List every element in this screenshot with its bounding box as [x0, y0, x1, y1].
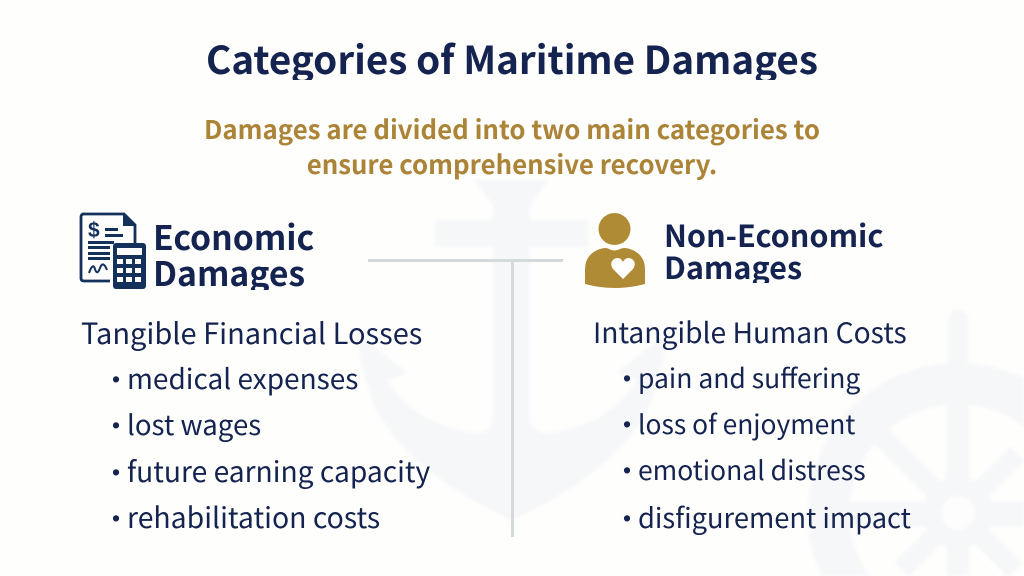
list: non-economic items: disfigurement impact — [638, 496, 911, 536]
list: economic items: • — [112, 412, 120, 438]
list: economic items: • — [112, 459, 120, 485]
icon: financial document and calculator: $ — [88, 219, 100, 242]
subtitle — [204, 110, 820, 182]
icon: person with heart — [585, 213, 645, 288]
heading: economic damages — [153, 218, 314, 290]
subheading: tangible financial losses: Tangible Financial Losses — [81, 311, 422, 353]
list: economic items: medical expenses — [127, 358, 358, 398]
list: economic items — [112, 358, 430, 537]
list: economic items: • — [112, 505, 120, 531]
list: economic items: future earning capacity — [127, 450, 430, 491]
subtitle: ensure comprehensive recovery. — [307, 145, 717, 182]
icon: financial document and calculator — [80, 212, 146, 289]
list: economic items: • — [112, 366, 120, 392]
subheading: intangible human costs: Intangible Human Costs — [593, 310, 907, 352]
list: non-economic items: pain and suffering — [638, 357, 860, 396]
panel: non-economic damages — [585, 213, 911, 536]
heading: non-economic damages — [664, 218, 883, 283]
list: economic items: rehabilitation costs — [127, 496, 380, 537]
subtitle: Damages are divided into two main categories to — [204, 110, 820, 147]
panel: economic damages — [80, 212, 430, 537]
list: non-economic items: loss of enjoyment — [638, 403, 855, 442]
list: economic items: lost wages — [127, 403, 261, 443]
list: non-economic items: emotional distress — [638, 449, 866, 488]
watermark anchor — [353, 180, 671, 520]
list: non-economic items: • — [623, 457, 631, 483]
list: non-economic items: • — [623, 365, 631, 391]
watermark ship wheel — [808, 310, 1024, 576]
list: non-economic items — [623, 357, 911, 536]
list: non-economic items: • — [623, 411, 631, 437]
list: non-economic items: • — [623, 505, 631, 531]
